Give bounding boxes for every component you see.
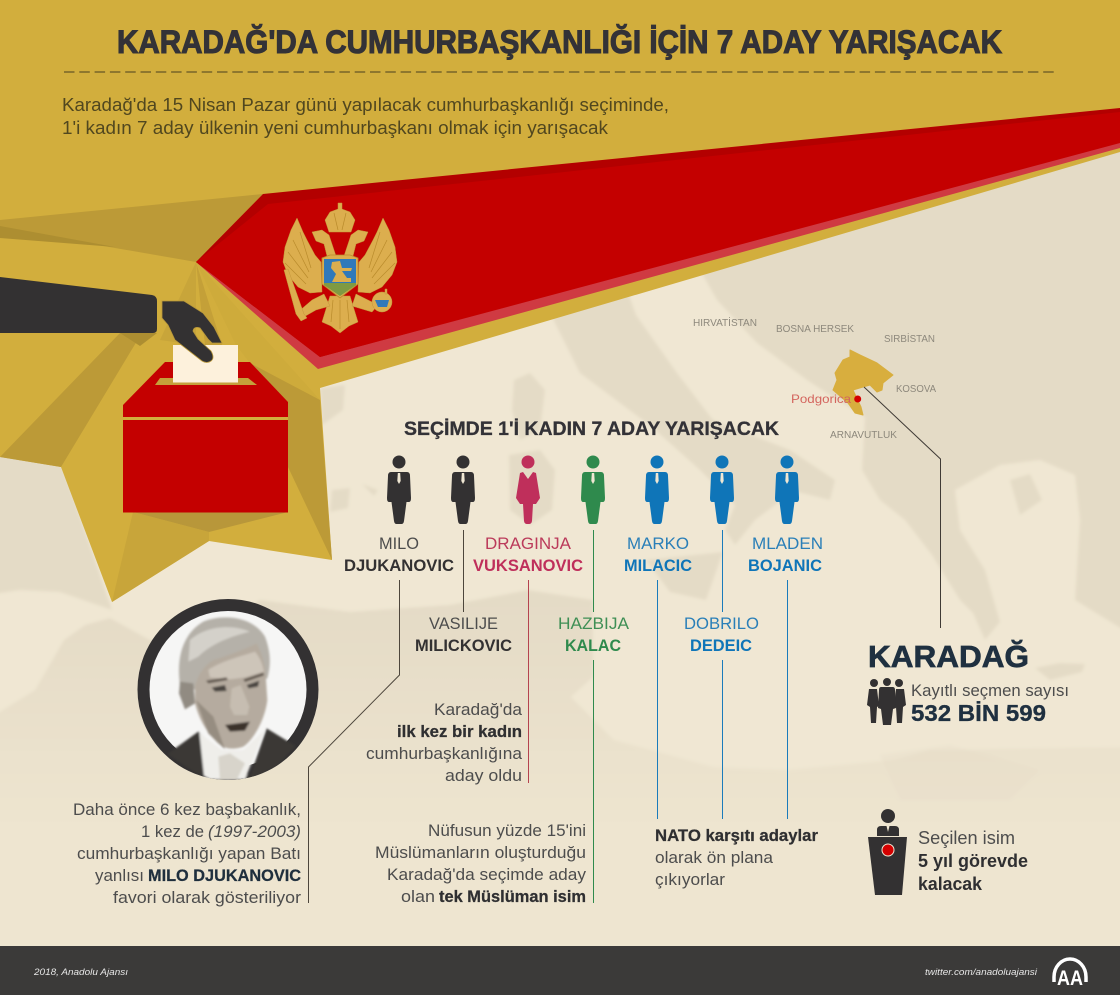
callout: only Muslim candidate bbox=[375, 822, 587, 906]
icon: man bbox=[645, 456, 669, 524]
candidate: Mladen Bojanic: MLADEN bbox=[752, 535, 823, 553]
callout: only Muslim candidate: tek Müslüman isim bbox=[439, 888, 586, 906]
candidate: Hazbija Kalac bbox=[558, 456, 629, 903]
footer bar: twitter.com/anadoluajansi bbox=[925, 967, 1038, 978]
tail bbox=[322, 296, 358, 333]
callout: anti-NATO candidates: çıkıyorlar bbox=[655, 871, 726, 889]
candidate: Vasilije Milickovic: MILICKOVIC bbox=[415, 637, 512, 655]
map: montenegro highlighted bbox=[833, 350, 893, 415]
icon: Anadolu Agency logo: AA bbox=[1057, 967, 1083, 990]
map: country labels: ARNAVUTLUK bbox=[830, 430, 897, 441]
legs bbox=[298, 294, 330, 318]
candidate: Dobrilo Dedeic: DOBRILO bbox=[684, 615, 759, 633]
map: iberia bbox=[0, 440, 112, 610]
arm bbox=[0, 277, 157, 333]
map: podgorica marker: Podgorica bbox=[791, 392, 851, 406]
flag banner bbox=[196, 108, 1120, 369]
callout: Djukanovic favourite bbox=[73, 801, 302, 907]
callout: anti-NATO candidates: NATO karşıtı adaylar bbox=[655, 827, 819, 845]
candidate: Vasilije Milickovic bbox=[415, 456, 512, 655]
candidate: Draginja Vuksanovic bbox=[473, 456, 583, 783]
box slot bbox=[155, 378, 257, 385]
candidate: Marko Milacic bbox=[624, 456, 692, 819]
scepter bbox=[284, 269, 307, 321]
candidate: Hazbija Kalac: KALAC bbox=[565, 637, 621, 655]
candidate: Marko Milacic: MARKO bbox=[627, 535, 689, 553]
panel: Karadağ voter count: 532 BİN 599 bbox=[911, 700, 1046, 726]
footer bar: 2018, Anadolu Ajansı bbox=[33, 967, 128, 978]
candidate: Dobrilo Dedeic bbox=[684, 456, 759, 819]
icon: man bbox=[775, 456, 799, 524]
callout: anti-NATO candidates: olarak ön plana bbox=[655, 849, 774, 867]
map: italy bbox=[545, 270, 835, 545]
orb bbox=[372, 292, 392, 312]
icon: voters bbox=[867, 678, 906, 725]
candidate: Marko Milacic: MILACIC bbox=[624, 557, 692, 575]
map: balkans and turkey landmass bbox=[690, 140, 1120, 640]
candidate: Draginja Vuksanovic: DRAGINJA bbox=[485, 535, 571, 553]
candidate: Milo Djukanovic: MILO bbox=[379, 535, 419, 553]
subtitle bbox=[62, 95, 669, 138]
panel: Karadağ voter count: Kayıtlı seçmen sayısı bbox=[911, 682, 1069, 700]
map: country labels: HIRVATİSTAN bbox=[693, 316, 757, 329]
panel: term of office: kalacak bbox=[918, 874, 983, 894]
callout: Djukanovic favourite: 1 kez de bbox=[141, 823, 204, 841]
icon: man bbox=[581, 456, 605, 524]
panel: Karadağ voter count bbox=[867, 639, 1069, 726]
title: KARADAĞ'DA CUMHURBAŞKANLIĞI İÇİN 7 ADAY YARIŞACAK bbox=[117, 24, 1002, 60]
callout: first woman candidate: aday oldu bbox=[445, 767, 522, 785]
callout: Djukanovic favourite: Daha önce 6 kez başbakanlık, bbox=[73, 801, 301, 819]
footer bar bbox=[0, 946, 1120, 995]
callout: Djukanovic favourite: (1997-2003) bbox=[208, 823, 301, 841]
connector: map to Karadağ bbox=[864, 387, 940, 628]
icon: woman bbox=[516, 456, 540, 524]
panel: Karadağ voter count: KARADAĞ bbox=[868, 639, 1029, 674]
ballot box body bbox=[123, 420, 288, 512]
candidate: Hazbija Kalac: HAZBIJA bbox=[558, 615, 629, 633]
panel: term of office: Seçilen isim bbox=[918, 828, 1015, 848]
map: country labels: SIRBİSTAN bbox=[884, 332, 935, 345]
portrait: Milo Djukanovic bbox=[144, 605, 312, 781]
callout: Djukanovic favourite: MILO DJUKANOVIC bbox=[148, 867, 301, 885]
right wing bbox=[358, 218, 397, 293]
icon: speaker at podium bbox=[868, 809, 907, 895]
callout: Djukanovic favourite: yanlısı bbox=[95, 867, 144, 885]
icon: man bbox=[710, 456, 734, 524]
map: north africa bbox=[0, 590, 1120, 946]
callout: anti-NATO candidates bbox=[655, 827, 819, 889]
left wing bbox=[283, 218, 322, 293]
icon: man bbox=[387, 456, 411, 524]
candidate: Milo Djukanovic: DJUKANOVIC bbox=[344, 557, 454, 575]
callout: first woman candidate: cumhurbaşkanlığına bbox=[366, 745, 523, 763]
callout: only Muslim candidate: Müslümanların oluşturduğu bbox=[375, 844, 586, 862]
map: islands bbox=[320, 373, 1085, 800]
icon: Anadolu Agency logo bbox=[1054, 959, 1086, 990]
callout: first woman candidate bbox=[366, 701, 523, 785]
heading: candidates: SEÇİMDE 1'İ KADIN 7 ADAY YARIŞACAK bbox=[404, 419, 779, 440]
callout: first woman candidate: Karadağ'da bbox=[434, 701, 523, 719]
candidate: Dobrilo Dedeic: DEDEIC bbox=[690, 637, 752, 655]
candidate: Draginja Vuksanovic: VUKSANOVIC bbox=[473, 557, 583, 575]
map: country labels: KOSOVA bbox=[896, 384, 936, 395]
right neck and head bbox=[344, 230, 368, 256]
divider bbox=[64, 71, 1056, 73]
callout: Djukanovic favourite: cumhurbaşkanlığı yapan Batı bbox=[77, 845, 301, 863]
callout: first woman candidate: ilk kez bir kadın bbox=[397, 723, 522, 741]
candidate: Milo Djukanovic bbox=[308, 456, 454, 903]
map: country labels bbox=[693, 316, 936, 441]
icon: ballot box and hand bbox=[0, 277, 288, 512]
callout: Djukanovic favourite: favori olarak gösteriliyor bbox=[113, 889, 302, 907]
callout: only Muslim candidate: olan bbox=[401, 888, 435, 906]
subtitle: Karadağ'da 15 Nisan Pazar günü yapılacak cumhurbaşkanlığı seçiminde, bbox=[62, 95, 669, 115]
ballot box lid bbox=[123, 362, 288, 417]
candidate: Mladen Bojanic bbox=[748, 456, 823, 819]
panel: term of office: 5 yıl görevde bbox=[918, 851, 1028, 871]
icon: man bbox=[451, 456, 475, 524]
left neck and head bbox=[312, 230, 336, 256]
callout: only Muslim candidate: Nüfusun yüzde 15'ini bbox=[428, 822, 586, 840]
callout: only Muslim candidate: Karadağ'da seçimde aday bbox=[387, 866, 587, 884]
ballot paper bbox=[173, 345, 238, 382]
hand bbox=[162, 301, 222, 362]
candidate: Vasilije Milickovic: VASILIJE bbox=[429, 615, 498, 633]
panel: gold star banner bbox=[0, 0, 1120, 602]
crown bbox=[325, 203, 355, 232]
panel: term of office bbox=[868, 809, 1028, 895]
flag emblem: double-headed eagle bbox=[283, 203, 397, 333]
map: country labels: BOSNA HERSEK bbox=[776, 324, 854, 335]
subtitle: 1'i kadın 7 aday ülkenin yeni cumhurbaşkanı olmak için yarışacak bbox=[62, 118, 609, 138]
candidate: Mladen Bojanic: BOJANIC bbox=[748, 557, 822, 575]
